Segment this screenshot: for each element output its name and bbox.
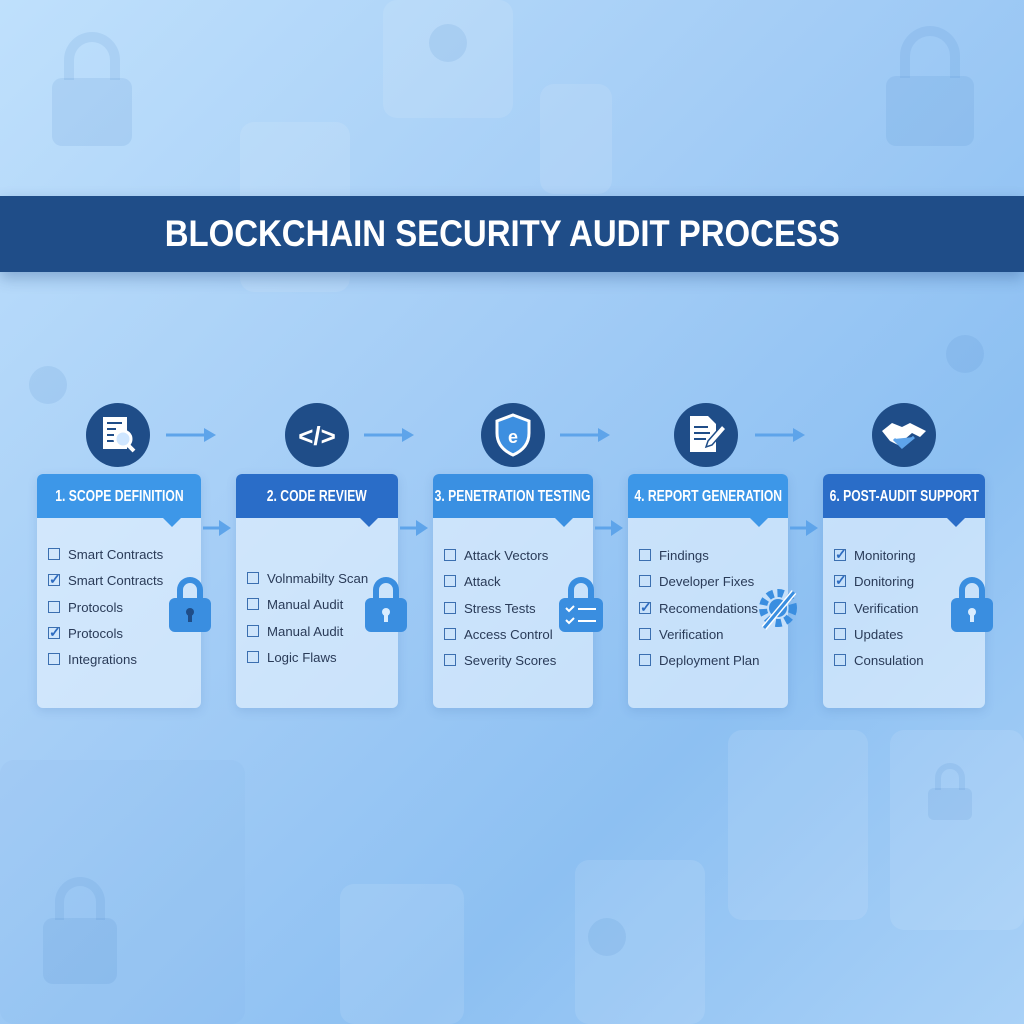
header	[236, 474, 398, 518]
checklist: Deployment Plan	[659, 653, 759, 668]
icon: lock checklist	[559, 577, 603, 632]
header: 4. REPORT GENERATION	[634, 488, 782, 505]
checklist: Findings	[659, 548, 709, 563]
arrow	[755, 428, 805, 442]
arrow	[364, 428, 414, 442]
checklist: Donitoring	[854, 574, 914, 589]
arrow	[166, 428, 216, 442]
panel: penetration testing	[433, 474, 593, 708]
checklist: Volnmabilty Scan	[267, 571, 368, 586]
checklist	[48, 547, 163, 667]
checklist: Attack	[464, 574, 501, 589]
checklist: Consulation	[854, 653, 924, 668]
title	[0, 196, 1024, 272]
icon: shield: e	[508, 427, 518, 447]
panel: code review	[236, 474, 398, 708]
checklist: Manual Audit	[267, 597, 343, 612]
checklist: Logic Flaws	[267, 650, 337, 665]
checklist: Access Control	[464, 627, 553, 642]
checklist: Recomendations	[659, 601, 758, 616]
checklist: Integrations	[68, 652, 137, 667]
arrow	[560, 428, 610, 442]
header: 6. POST-AUDIT SUPPORT	[829, 488, 979, 505]
arrow	[790, 520, 818, 536]
icon: tools	[759, 589, 797, 630]
icon: code	[285, 403, 349, 467]
checklist: Protocols	[68, 600, 123, 615]
checklist: Monitoring	[854, 548, 916, 563]
checklist: Developer Fixes	[659, 574, 754, 589]
checklist: Smart Contracts	[68, 547, 163, 562]
checklist: Stress Tests	[464, 601, 536, 616]
icon: lock 2	[365, 577, 407, 632]
panel: report generation	[628, 474, 788, 708]
checklist: Updates	[854, 627, 903, 642]
panel: post-audit support	[823, 474, 985, 708]
icon: scope document	[86, 403, 150, 467]
header	[823, 474, 985, 518]
header	[433, 474, 593, 518]
checklist	[834, 548, 924, 668]
arrow	[595, 520, 623, 536]
icon: shield	[481, 403, 545, 467]
checklist: Manual Audit	[267, 624, 343, 639]
checklist: Attack Vectors	[464, 548, 548, 563]
checklist: Severity Scores	[464, 653, 556, 668]
icon: lock 5	[951, 577, 993, 632]
checklist	[247, 571, 368, 665]
checklist	[639, 548, 759, 668]
icon: handshake	[872, 403, 936, 467]
icon: code: </>	[298, 421, 336, 451]
checklist: Smart Contracts	[68, 573, 163, 588]
header	[37, 474, 201, 518]
icon: lock 1	[169, 577, 211, 632]
checklist	[444, 548, 556, 668]
header: 3. PENETRATION TESTING	[435, 488, 591, 505]
icon: report pencil	[674, 403, 738, 467]
arrow	[400, 520, 428, 536]
header: 1. SCOPE DEFINITION	[55, 488, 183, 505]
header	[628, 474, 788, 518]
checklist: Verification	[854, 601, 919, 616]
panel: scope definition	[37, 474, 201, 708]
header: 2. CODE REVIEW	[267, 488, 367, 505]
title: BLOCKCHAIN SECURITY AUDIT PROCESS	[164, 213, 840, 254]
checklist: Verification	[659, 627, 724, 642]
checklist: Protocols	[68, 626, 123, 641]
arrow	[203, 520, 231, 536]
